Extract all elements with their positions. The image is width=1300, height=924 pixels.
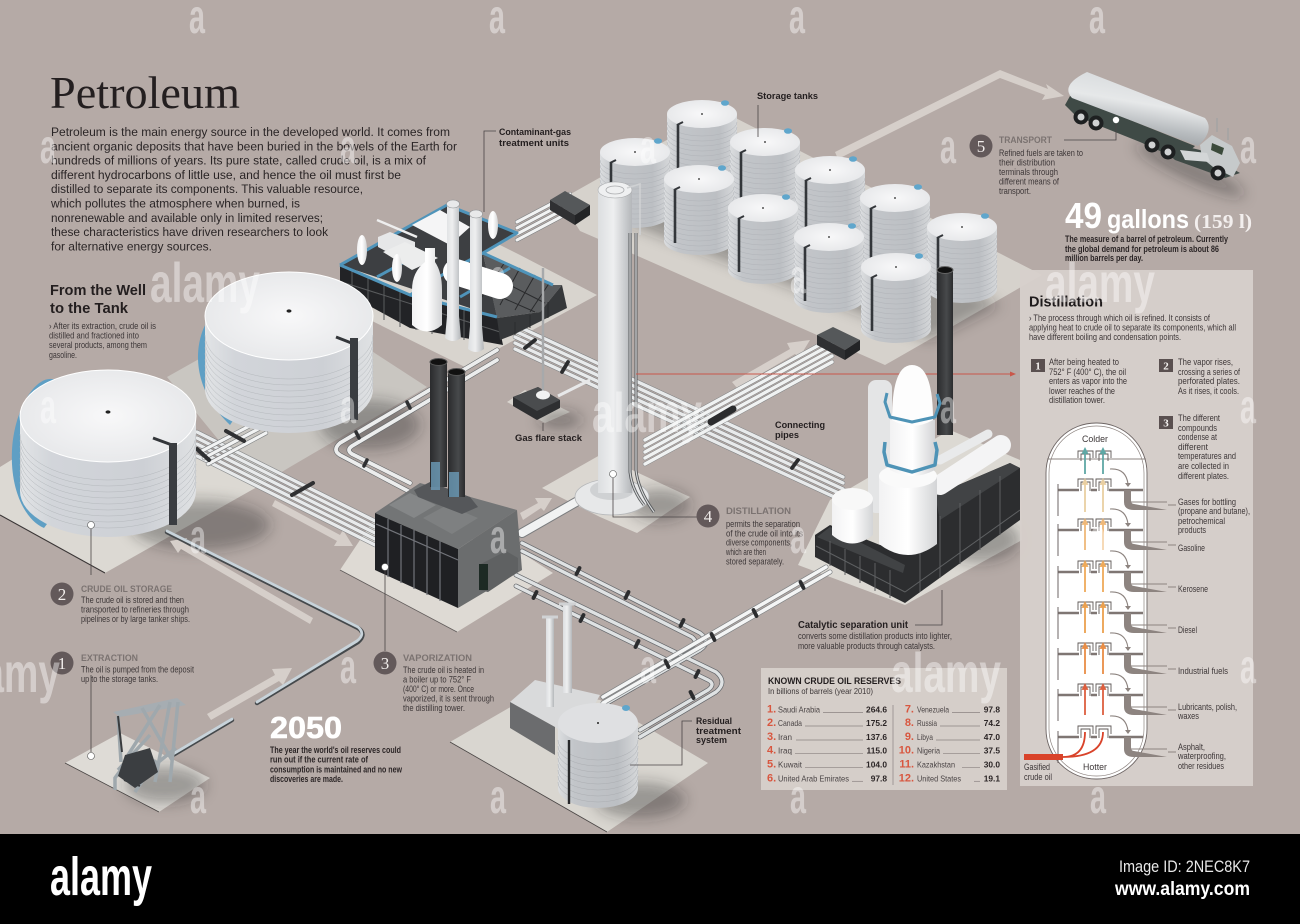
black stack <box>937 266 953 435</box>
stat: 49 gallons <box>1065 195 1252 263</box>
right column: 74.2 <box>984 718 1000 728</box>
label: connecting pipes: Connecting <box>775 420 825 430</box>
distillation panel <box>1020 270 1253 786</box>
right column: 7. <box>905 704 914 716</box>
pipes: extraction line <box>167 531 362 755</box>
step 1: After being heated to <box>1049 357 1119 367</box>
footer band: Image ID: 2NEC8K7 <box>1119 857 1250 876</box>
title: Petroleum <box>50 67 240 118</box>
step 1: distillation tower. <box>1049 395 1105 405</box>
callout 1: extraction: 1 <box>58 654 66 673</box>
intro text <box>50 125 457 253</box>
callout 4: distillation: 4 <box>704 507 713 526</box>
callout 4: distillation: diverse components, <box>726 538 792 548</box>
product labels <box>1024 497 1250 782</box>
callout 3: vaporization: VAPORIZATION <box>403 653 472 663</box>
callout 3: vaporization: 3 <box>381 654 389 673</box>
label: contaminant-gas treatment units <box>484 127 571 212</box>
pipes: tank to contaminant unit L-shaped pair <box>336 350 497 492</box>
left column: Iran <box>778 732 792 742</box>
left column: 5. <box>767 758 776 770</box>
watermarks: a <box>1090 771 1106 824</box>
callout 3: vaporization: (400° C) or more. Once <box>403 684 474 694</box>
step 1: 1 <box>1035 360 1041 372</box>
text: from the well intro: several products, among them <box>49 340 147 350</box>
callout 4: distillation: DISTILLATION <box>726 506 791 516</box>
right column <box>899 704 1000 784</box>
watermarks: a <box>790 251 806 304</box>
callout 2: crude oil storage: The crude oil is stored and then <box>81 595 184 605</box>
step 3: condense at <box>1178 432 1217 442</box>
watermarks: a <box>940 381 956 434</box>
heading: from the well to the tank: to the Tank <box>50 300 129 317</box>
product labels: Kerosene <box>1178 584 1208 594</box>
crude oil tank 1 <box>12 370 196 537</box>
watermarks: a <box>790 511 806 564</box>
watermarks: a <box>490 511 506 564</box>
step 3: 3 <box>1163 418 1169 430</box>
step 1: 752° F (400° C), the oil <box>1049 367 1126 377</box>
callout 2: crude oil storage <box>50 522 190 624</box>
right column: 19.1 <box>984 773 1000 783</box>
watermarks: a <box>1240 641 1256 694</box>
watermarks: a <box>490 771 506 824</box>
product labels: waxes <box>1177 711 1200 721</box>
step 1: lower reaches of the <box>1049 386 1115 396</box>
left column: Canada <box>778 718 802 728</box>
left column: 1. <box>767 704 776 716</box>
gas flare stack <box>513 268 590 420</box>
product labels: other residues <box>1178 761 1224 771</box>
label: residual treatment system <box>630 716 741 765</box>
step 2: crossing a series of <box>1178 367 1240 377</box>
tanker truck <box>1065 72 1240 180</box>
watermarks: a <box>1240 121 1256 174</box>
left column: Iraq <box>778 746 792 756</box>
watermarks: alamy <box>1045 251 1155 314</box>
text: from the well intro: distilled and fractioned into <box>49 330 139 340</box>
text: from the well intro: gasoline. <box>49 350 77 360</box>
watermarks: a <box>490 251 506 304</box>
vapor arrows <box>1063 449 1105 757</box>
label: gas flare stack: Gas flare stack <box>515 433 583 443</box>
callout 1: extraction: up to the storage tanks. <box>81 674 158 684</box>
intro text: distilled to separate its components. This valuable resource, <box>51 182 363 196</box>
right column: Russia <box>917 718 937 728</box>
product labels: Lubricants, polish, <box>1178 702 1237 712</box>
product labels: Gasified <box>1024 762 1050 772</box>
label: catalytic separation unit: converts some distillation products into lighter, <box>798 631 952 641</box>
left column: 3. <box>767 731 776 743</box>
callout 5: transport: TRANSPORT <box>999 135 1052 145</box>
watermarks: a <box>190 511 206 564</box>
step 3: temperatures and <box>1178 451 1236 461</box>
right column: Nigeria <box>917 746 940 756</box>
distillation column diagram: Hotter <box>1083 762 1107 772</box>
right column: 8. <box>905 717 914 729</box>
heading: from the well to the tank <box>50 282 146 317</box>
storage tanks <box>600 100 997 343</box>
stat: 2050: 2050 <box>270 710 342 745</box>
heading: from the well to the tank: From the Well <box>50 282 146 299</box>
callout 1: extraction: EXTRACTION <box>81 653 138 663</box>
left column: 2. <box>767 717 776 729</box>
step 3: compounds <box>1178 423 1218 433</box>
text: from the well intro <box>49 321 157 360</box>
stat: 49 gallons: million barrels per day. <box>1065 253 1143 263</box>
right column: 30.0 <box>984 759 1000 769</box>
label: connecting pipes <box>775 420 825 440</box>
left column: Saudi Arabia <box>778 704 820 714</box>
step 1 <box>1031 357 1127 405</box>
watermarks: a <box>1090 511 1106 564</box>
stat: 2050: run out if the current rate of <box>270 754 368 764</box>
label: catalytic separation unit: more valuable products through catalysts. <box>798 641 935 651</box>
step 3 <box>1159 413 1236 481</box>
black cooling blocks <box>815 463 1020 603</box>
left column: 97.8 <box>871 773 887 783</box>
watermarks: a <box>1240 381 1256 434</box>
product labels: Gases for bottling <box>1178 497 1236 507</box>
left column: United Arab Emirates <box>778 773 849 783</box>
crude oil tank 2 <box>198 272 373 433</box>
boiler unit <box>375 358 522 608</box>
left column <box>767 704 887 784</box>
watermarks: a <box>790 771 806 824</box>
watermarks: a <box>640 121 656 174</box>
known crude oil reserves table <box>761 668 1007 790</box>
callout 4: distillation: of the crude oil into its <box>726 528 804 538</box>
intro text: hundreds of millions of years. Its pure state, called crude oil, is a mix of <box>51 154 427 168</box>
label: contaminant-gas treatment units: treatment units <box>499 138 569 148</box>
right column: 97.8 <box>984 704 1000 714</box>
label: residual treatment system: treatment <box>696 726 741 736</box>
intro text: these characteristics have driven researchers to look <box>51 225 329 239</box>
step 3: different plates. <box>1178 471 1229 481</box>
known crude oil reserves table: In billions of barrels (year 2010) <box>768 686 873 696</box>
callout 5: transport: terminals through <box>999 167 1058 177</box>
stat: 2050: consumption is maintained and no new <box>270 764 402 774</box>
process flow arrows <box>170 70 1064 720</box>
left column: Kuwait <box>778 759 803 769</box>
stat: 49 gallons: The measure of a barrel of petroleum. Currently <box>1065 234 1228 244</box>
distillation column diagram: Colder <box>1082 434 1108 444</box>
pipes: boiler to tower <box>522 490 597 533</box>
contaminant-gas treatment units <box>340 200 567 352</box>
right column: 37.5 <box>984 746 1000 756</box>
right column: 9. <box>905 731 914 743</box>
product labels: crude oil <box>1024 772 1052 782</box>
callout 5: transport: 5 <box>977 137 985 156</box>
step 3: The different <box>1178 413 1220 423</box>
product labels: waterproofing, <box>1177 751 1226 761</box>
label: contaminant-gas treatment units: Contaminant-gas <box>499 127 571 137</box>
step 2: perforated plates. <box>1178 376 1240 386</box>
product labels: (propane and butane), <box>1178 506 1250 516</box>
intro text: different hydrocarbons of little use, and hence the oil must first be <box>51 168 401 182</box>
left column: 264.6 <box>866 704 887 714</box>
watermarks: alamy <box>891 641 1001 704</box>
step 2 <box>1159 357 1240 396</box>
distillation intro: have different boiling and condensation points. <box>1029 332 1181 342</box>
distillation tower <box>575 182 654 515</box>
text: from the well intro: › After its extraction, crude oil is <box>49 321 157 331</box>
right column: United States <box>917 773 961 783</box>
callout 3: vaporization <box>374 564 494 713</box>
catalytic separation unit <box>815 266 1020 603</box>
callout 1: extraction <box>50 652 194 760</box>
callout 4: distillation: permits the separation <box>726 519 800 529</box>
intro text: ancient organic deposits that have been buried in the bowels of the Earth for <box>51 139 457 153</box>
residual tank <box>558 703 638 808</box>
stat: 49 gallons: the global demand for petroleum is about 86 <box>1065 244 1219 254</box>
left column: 4. <box>767 745 776 757</box>
callout 1: extraction: The oil is pumped from the deposit <box>81 664 194 674</box>
step 2: 2 <box>1163 360 1169 372</box>
right column: Venezuela <box>917 704 949 714</box>
label: connecting pipes: pipes <box>775 430 799 440</box>
distillation intro: › The process through which oil is refined. It consists of <box>1029 313 1210 323</box>
gasified crude inlet <box>1024 754 1063 760</box>
product labels: products <box>1178 525 1206 535</box>
stat: 2050 <box>270 710 402 784</box>
pump jack <box>113 698 186 792</box>
intro text: nonrenewable and available only in limited reserves; <box>51 211 323 225</box>
intro text: Petroleum is the main energy source in the developed world. It comes from <box>51 125 450 139</box>
product labels: Asphalt, <box>1178 742 1205 752</box>
footer band: www.alamy.com <box>1114 879 1250 900</box>
callout 5: transport: different means of <box>999 176 1059 186</box>
left column: 115.0 <box>866 746 887 756</box>
watermarks: a <box>940 121 956 174</box>
footer band: alamy <box>50 847 152 907</box>
step 1: enters as vapor into the <box>1049 376 1127 386</box>
watermarks: a <box>340 121 356 174</box>
footer band <box>0 834 1300 924</box>
right column: 12. <box>899 772 914 784</box>
right column: 10. <box>899 745 914 757</box>
soft shadows <box>125 136 1249 818</box>
step 3: different <box>1178 442 1209 452</box>
intro text: which pollutes the atmosphere when burned, is <box>50 196 300 210</box>
callout 5: transport <box>970 117 1119 196</box>
right column: 11. <box>899 758 914 770</box>
black equipment boxes <box>480 253 567 340</box>
watermarks: a <box>40 121 56 174</box>
callout 3: vaporization: the distilling tower. <box>403 703 465 713</box>
left column: 104.0 <box>866 759 887 769</box>
callout 3: vaporization: a boiler up to 752° F <box>403 674 472 684</box>
stat: 49 gallons: gallons <box>1107 204 1189 234</box>
watermarks: a <box>340 381 356 434</box>
left column: 137.6 <box>866 732 887 742</box>
stat: 49 gallons: 49 <box>1065 195 1102 236</box>
callout 2: crude oil storage: 2 <box>58 585 66 604</box>
product labels: petrochemical <box>1178 516 1225 526</box>
distillation intro <box>1029 313 1236 342</box>
label: storage tanks: Storage tanks <box>757 91 818 101</box>
stat: 2050: The year the world's oil reserves could <box>270 745 401 755</box>
right column: 47.0 <box>984 732 1000 742</box>
residual treatment system <box>510 603 638 808</box>
label: catalytic separation unit: Catalytic separation unit <box>798 620 909 631</box>
callout 2: crude oil storage: CRUDE OIL STORAGE <box>81 584 172 594</box>
step 2: The vapor rises, <box>1178 357 1233 367</box>
step 2: As it rises, it cools. <box>1178 386 1239 396</box>
product labels: Diesel <box>1178 625 1197 635</box>
right column: Kazakhstan <box>917 759 955 769</box>
label: residual treatment system: system <box>696 735 727 745</box>
panel connector boxes <box>550 191 860 360</box>
watermarks: a <box>40 381 56 434</box>
callout 3: vaporization: vaporized, it is sent through <box>403 694 494 704</box>
red leader arrow to distillation panel <box>636 372 1016 376</box>
callout 4: distillation <box>610 470 804 566</box>
step 3: are collected in <box>1178 461 1229 471</box>
label: catalytic separation unit <box>798 590 952 651</box>
left column: 6. <box>767 772 776 784</box>
product labels: Gasoline <box>1178 543 1205 553</box>
right column: Libya <box>917 732 933 742</box>
callout 5: transport: their distribution <box>999 158 1055 168</box>
watermarks: alamy <box>150 251 260 314</box>
callout 2: crude oil storage: pipelines or by large tanker ships. <box>81 614 190 624</box>
left column: 175.2 <box>866 718 887 728</box>
distillation intro: applying heat to crude oil to separate its components, which all <box>1029 322 1236 332</box>
stat: 2050: discoveries are made. <box>270 774 343 784</box>
chimney stacks <box>430 358 465 497</box>
callout 4: distillation: stored separately. <box>726 556 784 566</box>
callout 5: transport: transport. <box>999 186 1031 196</box>
callout 3: vaporization: The crude oil is heated in <box>403 665 484 675</box>
label: residual treatment system: Residual <box>696 716 732 726</box>
callout 5: transport: Refined fuels are taken to <box>999 148 1083 158</box>
label: gas flare stack <box>515 423 583 443</box>
watermarks: a <box>190 771 206 824</box>
product labels: Industrial fuels <box>1178 666 1229 676</box>
white columns and vessels <box>832 365 1001 555</box>
distillation column diagram <box>1024 423 1176 779</box>
callout 4: distillation: which are then <box>725 547 766 557</box>
watermarks: a <box>640 641 656 694</box>
watermarks: alamy <box>592 381 702 444</box>
pipes: refinery cross bundles <box>515 194 843 501</box>
pipes: tank bundles <box>197 422 375 545</box>
distillation heading: Distillation <box>1029 294 1103 310</box>
ground plates <box>0 110 1042 832</box>
pipes: boiler lines to residual unit <box>516 543 830 737</box>
stat: 49 gallons: (159 l) <box>1194 211 1252 233</box>
known crude oil reserves table: KNOWN CRUDE OIL RESERVES <box>768 676 901 687</box>
connecting pipes <box>167 194 843 755</box>
label: storage tanks <box>757 91 818 137</box>
intro text: for alternative energy sources. <box>51 239 212 253</box>
watermarks: a <box>340 641 356 694</box>
callout 2: crude oil storage: transported to refineries through <box>81 604 189 614</box>
